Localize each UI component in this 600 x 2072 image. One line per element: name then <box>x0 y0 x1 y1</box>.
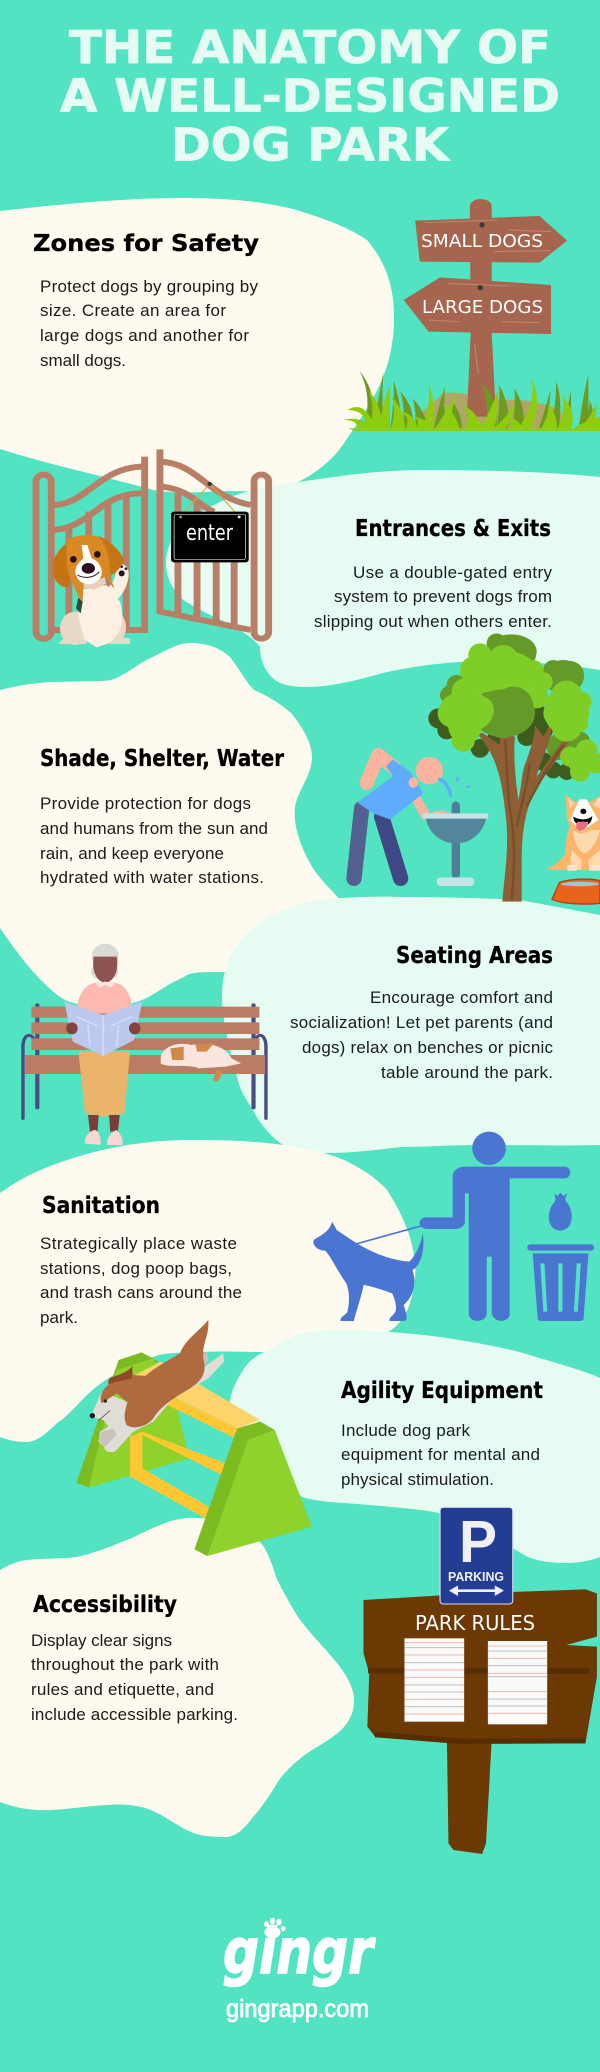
heading: sanitation: Sanitation <box>42 1193 160 1219</box>
icon: park rules board with parking sign: PARK RULES <box>415 1611 535 1635</box>
text: sanitation body: park. <box>40 1308 78 1327</box>
text: zones body: size. Create an area for <box>40 301 226 320</box>
text: seating body <box>290 988 554 1082</box>
heading: accessibility: Accessibility <box>33 1592 177 1618</box>
icon: person at water fountain <box>354 755 488 886</box>
footer url: gingrapp.com <box>226 1995 369 2023</box>
text: seating body: dogs) relax on benches or picnic <box>302 1038 554 1057</box>
text: sanitation body: and trash cans around the <box>40 1283 242 1302</box>
icon: person walking dog and trash bin <box>313 1132 594 1321</box>
blob: shade panel <box>0 643 340 1008</box>
blob: seating panel <box>222 897 600 1153</box>
text: zones body <box>40 277 258 370</box>
text: agility body: Include dog park <box>341 1421 470 1440</box>
heading: seating areas: Seating Areas <box>396 943 553 969</box>
blob: zones panel <box>0 198 394 492</box>
blob: agility panel <box>229 1330 600 1563</box>
icon: tree <box>428 633 600 902</box>
text: shade body: and humans from the sun and <box>40 819 268 838</box>
text: accessibility body: Display clear signs <box>31 1631 172 1650</box>
logo: gingr: gingr <box>223 1915 376 1988</box>
text: shade body <box>40 794 268 887</box>
icon: corgi and water bowl <box>546 794 600 904</box>
text: entrances body <box>314 563 552 631</box>
text: entrances body: slipping out when others enter. <box>314 612 552 631</box>
title: THE ANATOMY OF <box>69 21 551 74</box>
heading: zones for safety: Zones for Safety <box>33 231 259 257</box>
text: accessibility body: rules and etiquette, and <box>31 1680 214 1699</box>
text: accessibility body <box>31 1631 238 1724</box>
icon: gate with enter sign and beagle: enter <box>186 521 234 546</box>
icon: direction signpost with grass <box>343 199 600 431</box>
icon: direction signpost with grass: SMALL DOGS <box>421 231 543 252</box>
blob: accessibility panel <box>0 1518 354 1837</box>
text: agility body <box>341 1421 540 1489</box>
title <box>60 21 560 172</box>
blob: sanitation panel <box>0 1140 415 1442</box>
icon: park rules board with parking sign <box>364 1507 597 1854</box>
text: entrances body: system to prevent dogs from <box>334 587 552 606</box>
heading: agility equipment: Agility Equipment <box>341 1378 543 1404</box>
icon: agility jump with leaping dog <box>77 1320 312 1556</box>
text: entrances body: Use a double-gated entry <box>353 563 552 582</box>
icon: gate with enter sign and beagle <box>36 449 269 647</box>
text: sanitation body: Strategically place waste <box>40 1234 237 1253</box>
title: A WELL-DESIGNED <box>60 70 560 122</box>
text: seating body: table around the park. <box>381 1063 553 1082</box>
blob: entrances panel <box>166 470 600 687</box>
text: zones body: small dogs. <box>40 351 126 370</box>
text: accessibility body: include accessible parking. <box>31 1705 238 1724</box>
text: sanitation body <box>40 1234 242 1327</box>
text: agility body: physical stimulation. <box>341 1470 494 1489</box>
icon: person reading on bench with dog <box>23 944 266 1145</box>
text: shade body: hydrated with water stations. <box>40 868 264 887</box>
text: zones body: Protect dogs by grouping by <box>40 277 258 296</box>
icon: park rules board with parking sign: P <box>459 1509 497 1575</box>
heading: entrances and exits: Entrances & Exits <box>355 516 551 542</box>
text: seating body: Encourage comfort and <box>370 988 553 1007</box>
title: DOG PARK <box>171 118 451 172</box>
text: agility body: equipment for mental and <box>341 1445 540 1464</box>
text: zones body: large dogs and another for <box>40 326 249 345</box>
heading: shade shelter water: Shade, Shelter, Water <box>40 746 285 772</box>
text: accessibility body: throughout the park with <box>31 1655 219 1674</box>
text: seating body: socialization! Let pet parents (and <box>290 1013 553 1032</box>
text: shade body: rain, and keep everyone <box>40 844 224 863</box>
icon: direction signpost with grass: LARGE DOGS <box>422 297 543 318</box>
text: sanitation body: stations, dog poop bags, <box>40 1259 232 1278</box>
icon: park rules board with parking sign: PARKING <box>448 1569 504 1584</box>
text: shade body: Provide protection for dogs <box>40 794 251 813</box>
